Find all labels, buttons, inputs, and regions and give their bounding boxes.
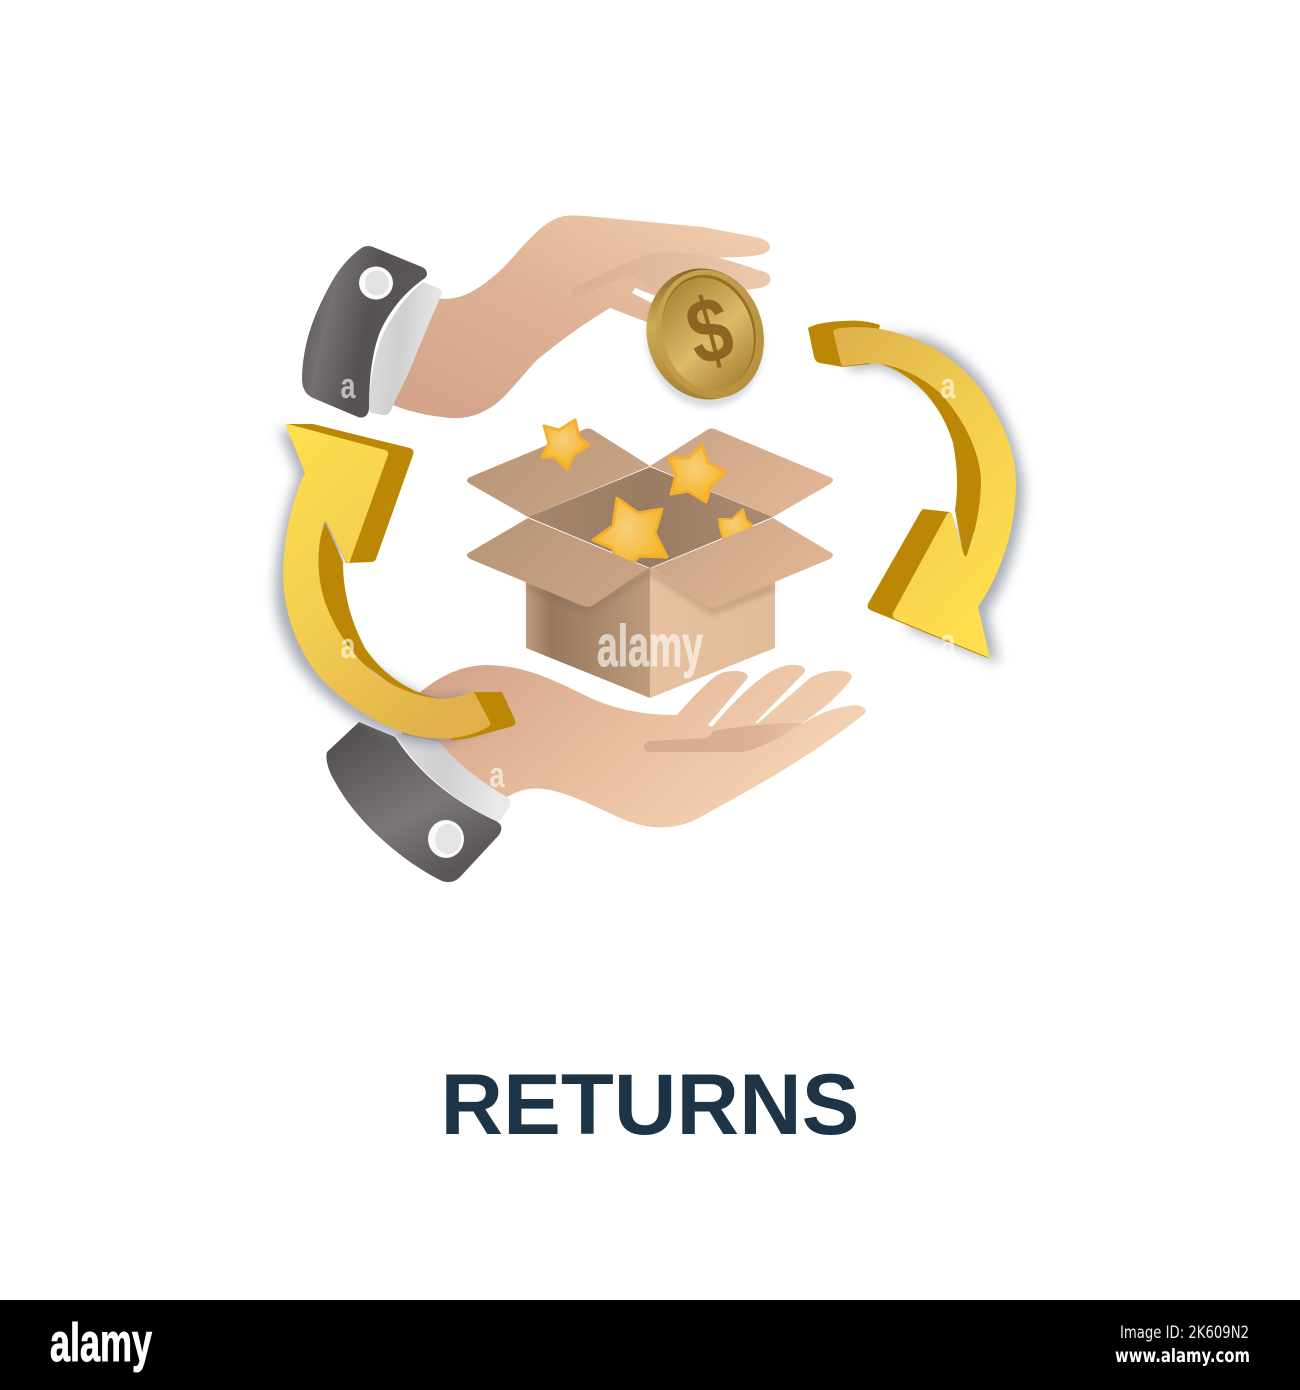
right curved arrow	[808, 321, 1024, 663]
watermark letters: a	[940, 365, 956, 406]
watermark letters: a	[340, 365, 356, 406]
left curved arrow	[275, 424, 515, 743]
back right flap	[650, 428, 833, 517]
footer logo: alamy	[50, 1313, 152, 1373]
box left side	[526, 568, 650, 698]
bottom hand	[326, 665, 866, 882]
arrow dark side	[286, 424, 414, 563]
box interior	[528, 467, 773, 568]
watermark: alamy over box: alamy	[597, 614, 703, 679]
cuff button	[359, 266, 393, 300]
large star inside box	[593, 498, 667, 575]
watermark letters: a	[940, 621, 956, 662]
cuff button	[428, 820, 464, 858]
front left flap	[467, 518, 648, 607]
dollar coin	[632, 255, 778, 421]
shirt cuff	[395, 733, 510, 821]
watermark letters: a	[490, 754, 505, 795]
dollar sign: $	[676, 276, 743, 386]
small star on back left flap	[542, 420, 589, 469]
shirt cuff	[369, 282, 442, 415]
arrow yellow face	[833, 327, 1016, 658]
arrow yellow face	[283, 424, 490, 739]
star on back right flap	[669, 445, 726, 502]
title: RETURNS	[440, 1057, 860, 1153]
back left flap	[467, 428, 650, 517]
open cardboard box with stars	[467, 420, 833, 698]
small star inside box	[719, 509, 752, 545]
top hand holding coin	[302, 215, 771, 418]
watermark letters	[340, 365, 956, 795]
website: www.alamy.com	[1115, 1345, 1250, 1367]
arrow dark side	[808, 321, 880, 367]
image id: Image ID: 2K609N2	[1120, 1323, 1249, 1343]
dark jacket cuff	[302, 246, 427, 418]
box right side	[650, 568, 775, 698]
watermark letters: a	[340, 625, 356, 666]
dark jacket cuff	[326, 722, 501, 882]
front right flap	[652, 518, 833, 607]
footer bar	[0, 1300, 1300, 1390]
